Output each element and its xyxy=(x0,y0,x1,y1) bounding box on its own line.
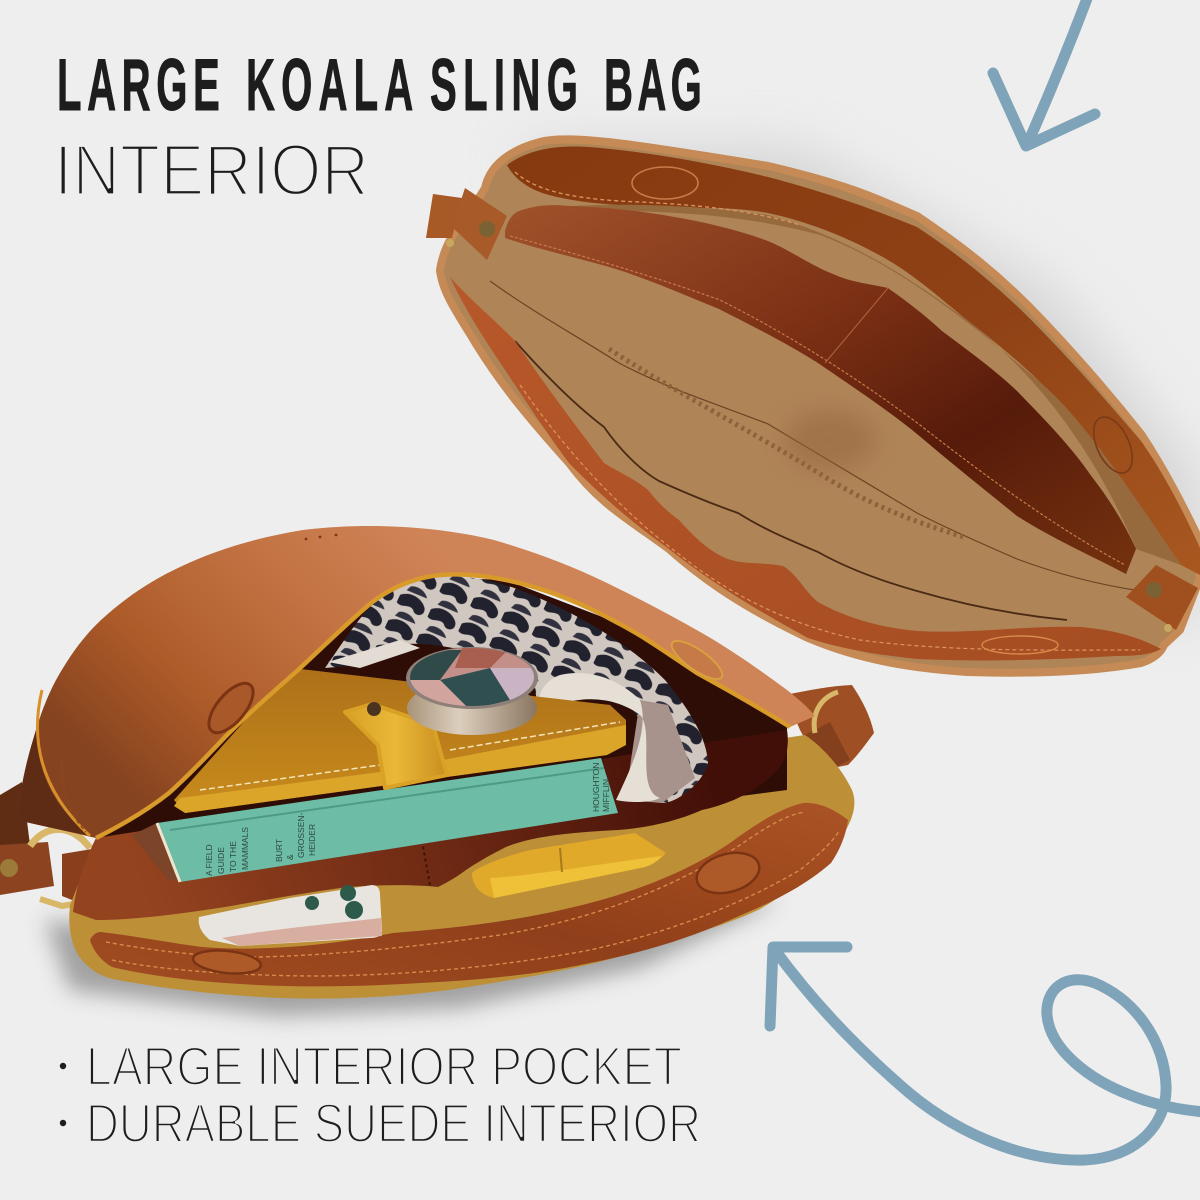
title: BAG xyxy=(604,46,702,126)
tin xyxy=(405,645,540,735)
snap rings on flap xyxy=(632,167,1140,479)
title xyxy=(57,46,702,126)
outer edge and suede xyxy=(440,139,1200,673)
right strap tab xyxy=(1126,565,1198,632)
book spine text: HEIDER xyxy=(307,824,317,856)
feature list xyxy=(60,1035,701,1154)
book spine text: MAMMALS xyxy=(240,827,250,870)
left strap and buckle xyxy=(0,782,100,906)
back flap leather xyxy=(507,146,1200,575)
bottom bag photo xyxy=(0,526,874,999)
book spine text xyxy=(204,763,611,876)
book spine text: GUIDE xyxy=(216,847,226,874)
green book xyxy=(132,758,618,882)
scarf xyxy=(325,576,708,803)
dark opening xyxy=(96,577,787,880)
title: SLING xyxy=(430,46,578,126)
left strap tab xyxy=(426,188,507,260)
suede seams xyxy=(490,281,1141,620)
book spine text: MIFFLIN xyxy=(601,779,611,812)
lower leather band xyxy=(450,277,1161,660)
yellow wallet xyxy=(174,668,626,813)
small yellow wallet xyxy=(472,833,666,898)
book spine text: A FIELD xyxy=(204,844,214,876)
icon: bottom blue looping arrow xyxy=(770,947,1200,1160)
back suede shadow xyxy=(519,205,1181,565)
book spine text: HOUGHTON xyxy=(591,763,601,812)
title: KOALA xyxy=(246,46,413,126)
right strap and ring xyxy=(785,685,874,772)
flap suede xyxy=(69,735,854,999)
top bag photo xyxy=(426,139,1200,673)
flap snap dimples xyxy=(192,846,764,976)
book spine text: TO THE xyxy=(228,841,238,872)
book spine text: & xyxy=(285,854,295,860)
icon: top blue arrow xyxy=(993,0,1095,146)
feature: durable suede interior: DURABLE SUEDE INTERIOR xyxy=(86,1092,701,1154)
book spine text: BURT xyxy=(274,839,284,862)
subtitle: INTERIOR xyxy=(54,131,369,211)
feature: large interior pocket: LARGE INTERIOR POCKET xyxy=(86,1035,682,1097)
title: LARGE xyxy=(57,46,220,126)
phone xyxy=(199,885,382,946)
book spine text: GROSSEN- xyxy=(296,812,306,858)
flap leather band xyxy=(90,803,848,986)
soft shadows xyxy=(45,150,1200,1016)
interior dark pocket xyxy=(73,730,788,920)
pocket dark leather xyxy=(505,205,1136,574)
main leather shell xyxy=(17,526,815,838)
